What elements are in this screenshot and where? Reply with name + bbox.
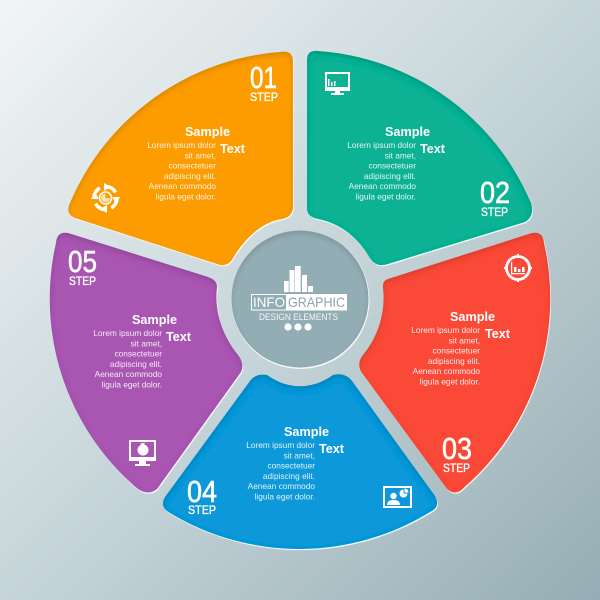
text block 03: Lorem ipsum dolor bbox=[411, 325, 480, 335]
panel: step 04 blue bbox=[163, 374, 438, 550]
subtitle: DESIGN ELEMENTS bbox=[259, 312, 338, 322]
center circle bbox=[232, 230, 370, 369]
step number 05 bbox=[68, 244, 97, 288]
text block 02: adipiscing elit. bbox=[364, 171, 416, 181]
text block 02: consectetuer bbox=[368, 161, 416, 171]
text block 01: Lorem ipsum dolor bbox=[147, 140, 216, 150]
text block 02: sit amet, bbox=[385, 150, 416, 160]
text block 01 bbox=[147, 125, 246, 202]
icon: bar chart bbox=[284, 266, 313, 292]
step number 02: STEP bbox=[481, 205, 508, 219]
text block 04: Aenean commodo bbox=[248, 481, 315, 491]
text block 02: Text bbox=[420, 142, 446, 156]
text block 03: adipiscing elit. bbox=[428, 356, 480, 366]
text block 03: consectetuer bbox=[432, 346, 480, 356]
icon: target with chart bbox=[504, 254, 532, 282]
text block 03: Text bbox=[485, 327, 511, 341]
text block 02: Sample bbox=[385, 125, 430, 139]
text block 05: adipiscing elit. bbox=[110, 359, 162, 369]
text block 05: Aenean commodo bbox=[95, 369, 162, 379]
text block 03: Sample bbox=[450, 310, 495, 324]
text block 02 bbox=[347, 125, 446, 202]
text block 05: consectetuer bbox=[114, 349, 162, 359]
text block 05: sit amet, bbox=[131, 338, 162, 348]
step number 03: STEP bbox=[443, 461, 470, 475]
step number 05: STEP bbox=[69, 274, 96, 288]
text block 04: ligula eget dolor. bbox=[255, 492, 315, 502]
text block 05: ligula eget dolor. bbox=[102, 380, 162, 390]
step number 01 bbox=[250, 60, 278, 104]
text block 04: Sample bbox=[284, 425, 329, 439]
step number 05: 05 bbox=[68, 244, 97, 279]
text block 05 bbox=[93, 313, 192, 390]
text block 04: Lorem ipsum dolor bbox=[246, 440, 315, 450]
text block 03: Aenean commodo bbox=[413, 366, 480, 376]
text block 03: sit amet, bbox=[449, 335, 480, 345]
text block 03: ligula eget dolor. bbox=[420, 376, 480, 386]
icon: presenter board bbox=[383, 486, 412, 508]
text block 04: Text bbox=[319, 442, 345, 456]
text block 03 bbox=[411, 310, 511, 386]
icon: monitor with pie chart bbox=[129, 440, 156, 466]
text block 01: adipiscing elit. bbox=[164, 171, 216, 181]
text block 05: Lorem ipsum dolor bbox=[93, 328, 162, 338]
text block 05: Sample bbox=[132, 313, 177, 327]
text block 04 bbox=[246, 425, 345, 502]
text block 01: ligula eget dolor. bbox=[156, 192, 216, 202]
logo: infographic wordmark: INFO bbox=[253, 294, 285, 310]
text block 01: Aenean commodo bbox=[149, 181, 216, 191]
icon: monitor with chart bbox=[325, 72, 350, 95]
panel: step 05 purple bbox=[50, 233, 243, 494]
text block 01: sit amet, bbox=[185, 150, 216, 160]
panel: step 03 red bbox=[359, 233, 551, 494]
text block 01: consectetuer bbox=[168, 161, 216, 171]
step number 04: 04 bbox=[187, 474, 217, 509]
logo: infographic wordmark: GRAPHIC bbox=[288, 294, 345, 310]
text block 04: consectetuer bbox=[267, 461, 315, 471]
icon: circular arrows bbox=[91, 183, 120, 213]
text block 01: Sample bbox=[185, 125, 230, 139]
logo: infographic wordmark bbox=[252, 294, 347, 310]
text block 02: ligula eget dolor. bbox=[356, 192, 416, 202]
text block 04: sit amet, bbox=[284, 450, 315, 460]
text block 01: Text bbox=[220, 142, 246, 156]
step number 03: 03 bbox=[442, 431, 472, 466]
panel: step 02 teal bbox=[307, 51, 533, 266]
text block 02: Aenean commodo bbox=[349, 181, 416, 191]
text block 02: Lorem ipsum dolor bbox=[347, 140, 416, 150]
step number 02: 02 bbox=[480, 175, 510, 210]
step number 01: 01 bbox=[250, 60, 277, 95]
text block 05: Text bbox=[166, 330, 192, 344]
step number 01: STEP bbox=[250, 90, 278, 104]
three dots bbox=[284, 323, 312, 331]
step number 04: STEP bbox=[188, 503, 216, 517]
text block 04: adipiscing elit. bbox=[263, 471, 315, 481]
panel: step 01 orange bbox=[68, 52, 294, 266]
